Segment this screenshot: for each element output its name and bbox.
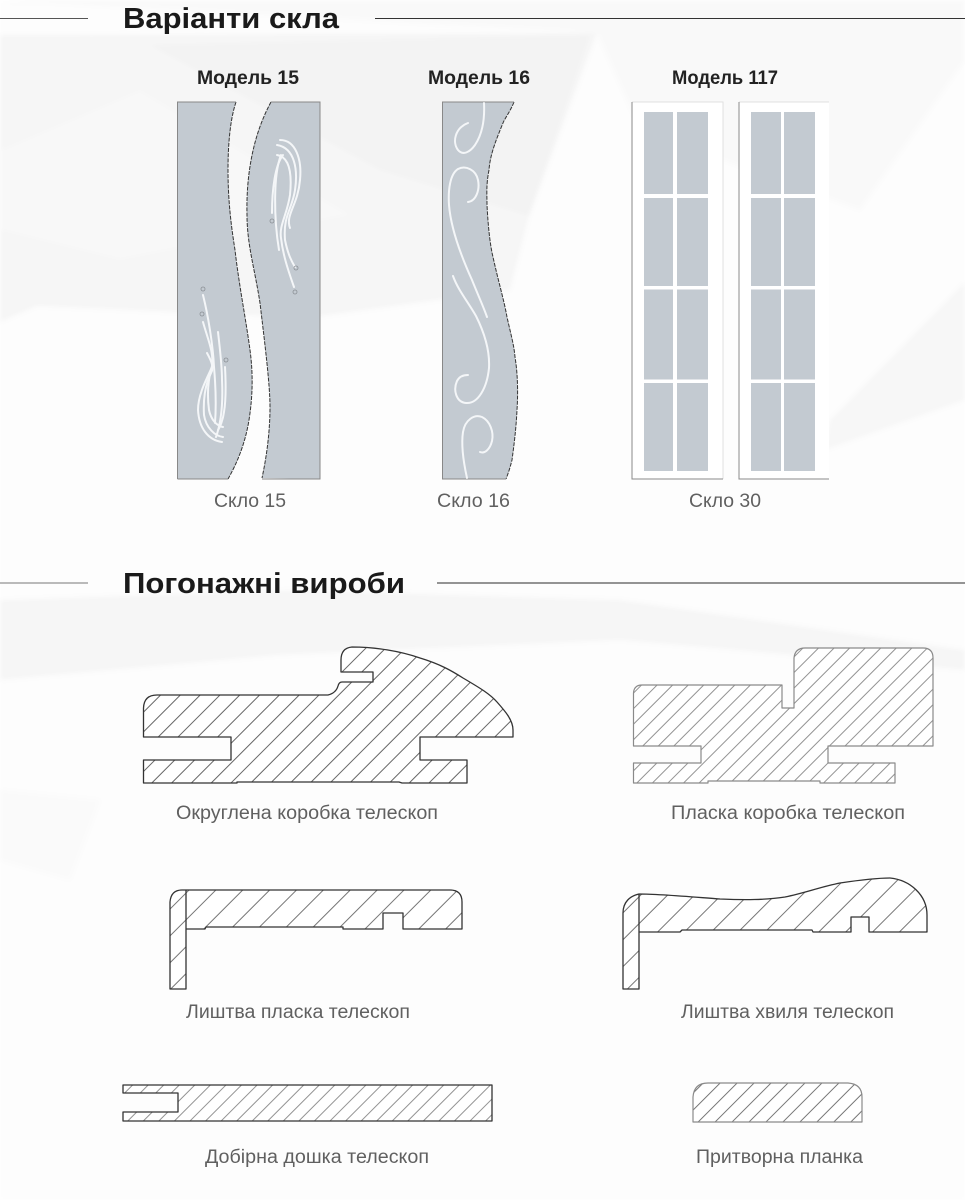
profile drawing xyxy=(634,648,933,783)
panel: flat telescopic box xyxy=(634,648,933,824)
panel: model 117 xyxy=(632,68,829,512)
caption: glass 30: Скло 30 xyxy=(689,491,761,512)
profile drawing xyxy=(693,1083,862,1122)
heading rule: mouldings left xyxy=(0,582,88,584)
glass 30 right frame xyxy=(739,102,829,479)
glass 15 right leaf xyxy=(247,102,320,479)
panel: rounded telescopic box xyxy=(144,647,513,824)
caption: Лиштва хвиля телескоп xyxy=(681,1002,894,1023)
panel: telescopic extension board xyxy=(123,1085,492,1168)
heading rule: glass right xyxy=(375,18,965,20)
panel: model 15 xyxy=(178,68,320,512)
heading rule: glass left xyxy=(0,18,88,20)
panel: flat telescopic casing xyxy=(170,890,462,1023)
caption: Добірна дошка телескоп xyxy=(205,1147,429,1168)
model 15 title: Модель 15 xyxy=(197,68,299,89)
glass 30 left frame xyxy=(632,102,723,479)
panel: model 16 xyxy=(428,68,530,512)
profile drawing xyxy=(144,647,513,783)
glass 16 leaf xyxy=(442,102,518,479)
caption: Округлена коробка телескоп xyxy=(176,803,438,824)
caption: Лиштва пласка телескоп xyxy=(186,1002,410,1023)
profile drawing xyxy=(123,1085,492,1121)
glass 15 left leaf xyxy=(178,102,252,479)
model 117 title: Модель 117 xyxy=(672,68,778,89)
model 16 title: Модель 16 xyxy=(428,68,530,89)
caption: glass 16: Скло 16 xyxy=(437,491,510,512)
heading: mouldings: Погонажні вироби xyxy=(123,568,405,600)
panel: wave telescopic casing xyxy=(623,878,927,1023)
profile drawing xyxy=(170,890,462,989)
heading: glass options: Варіанти скла xyxy=(123,3,340,35)
profile drawing xyxy=(623,878,927,989)
caption: Пласка коробка телескоп xyxy=(671,803,905,824)
caption: glass 15: Скло 15 xyxy=(214,491,286,512)
heading rule: mouldings right xyxy=(437,582,965,584)
caption: Притворна планка xyxy=(696,1147,863,1168)
panel: door stop strip xyxy=(693,1083,863,1168)
